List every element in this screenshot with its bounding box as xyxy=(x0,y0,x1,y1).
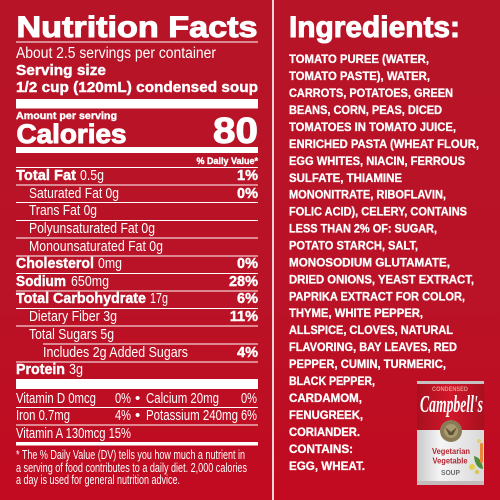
calories block: Amount per serving xyxy=(16,111,117,122)
vitamins and minerals: Potassium 240mg xyxy=(146,407,238,424)
nutrient table: 650mg xyxy=(71,273,109,290)
nutrient table: 6% xyxy=(237,291,258,307)
vitamins and minerals: Vitamin A 130mcg 15% xyxy=(16,425,131,442)
nutrient table: Total Sugars 5g xyxy=(29,326,114,343)
nutrient table: 0% xyxy=(237,256,258,272)
ingredient list: DRIED ONIONS, YEAST EXTRACT, xyxy=(289,272,474,286)
nutrient table: Polyunsaturated Fat 0g xyxy=(29,220,155,237)
nutrient table: Total Carbohydrate xyxy=(16,291,146,307)
icon: Campbell's soup can xyxy=(417,381,484,485)
nutrient table: 17g xyxy=(150,290,168,307)
calories block: 80 xyxy=(213,110,258,151)
nutrient table: 28% xyxy=(229,274,258,290)
nutrient table: Includes 2g Added Sugars xyxy=(43,344,188,361)
vitamins and minerals: 6% xyxy=(241,407,257,424)
ingredient list: TOMATO PASTE), WATER, xyxy=(289,69,430,83)
ingredient list: PAPRIKA EXTRACT FOR COLOR, xyxy=(289,290,465,304)
ingredient list: SULFATE, THIAMINE xyxy=(289,171,402,185)
servings block xyxy=(16,42,258,108)
nutrient table: 11% xyxy=(230,309,258,325)
footnote: a day is used for general nutrition advice. xyxy=(16,473,180,487)
vitamins and minerals: • xyxy=(135,390,140,407)
ingredient list: EGG WHITES, NIACIN, FERROUS xyxy=(289,154,465,168)
servings block: About 2.5 servings per container xyxy=(16,45,216,62)
servings block: 1/2 cup (120mL) condensed soup xyxy=(16,79,258,96)
nutrient table: Trans Fat 0g xyxy=(29,202,97,219)
nutrient table: 4% xyxy=(237,345,258,361)
ingredient list: MONOSODIUM GLUTAMATE, xyxy=(289,256,450,270)
ingredient list xyxy=(289,52,479,473)
vitamins and minerals xyxy=(16,390,258,446)
nutrient table: Dietary Fiber 3g xyxy=(29,308,117,325)
column divider xyxy=(272,0,274,500)
heading: Nutrition Facts: Nutrition Facts xyxy=(16,11,258,44)
panel: nutrition facts xyxy=(16,11,258,487)
panel: ingredients xyxy=(289,11,484,485)
icon: Campbell's soup can: CONDENSED xyxy=(432,387,469,393)
calories block xyxy=(16,110,258,166)
ingredient list: FOLIC ACID), CELERY, CONTAINS xyxy=(289,204,467,218)
nutrient table: 1% xyxy=(237,168,258,184)
icon: Campbell's soup can: Vegetable xyxy=(432,456,468,466)
nutrient table: Saturated Fat 0g xyxy=(29,185,119,202)
vitamins and minerals: 4% xyxy=(115,407,131,424)
ingredient list: TOMATOES IN TOMATO JUICE, xyxy=(289,120,456,134)
vitamins and minerals: Iron 0.7mg xyxy=(16,407,70,424)
ingredient list: LESS THAN 2% OF: SUGAR, xyxy=(289,222,437,236)
ingredient list: POTATO STARCH, SALT, xyxy=(289,238,418,252)
ingredient list: TOMATO PUREE (WATER, xyxy=(289,52,429,66)
footnote: a serving of food contributes to a daily diet. 2,000 calories xyxy=(16,461,247,475)
nutrient table: Total Fat xyxy=(16,168,76,184)
vitamins and minerals: Calcium 20mg xyxy=(146,390,219,407)
heading: Ingredients: Ingredients: xyxy=(289,11,460,44)
nutrient table: 0mg xyxy=(98,255,122,272)
icon: Campbell's soup can: SOUP xyxy=(441,470,460,477)
vitamins and minerals: • xyxy=(135,407,140,424)
vitamins and minerals: Vitamin D 0mcg xyxy=(16,390,96,407)
nutrient table: Protein xyxy=(16,362,65,378)
icon: Campbell's soup can: Vegetarian xyxy=(432,446,470,456)
nutrient table: 3g xyxy=(69,361,83,378)
nutrient table: 0% xyxy=(237,186,258,202)
ingredient list: BLACK PEPPER, xyxy=(289,374,375,388)
ingredient list: MONONITRATE, RIBOFLAVIN, xyxy=(289,188,446,202)
nutrient table: Monounsaturated Fat 0g xyxy=(29,238,163,255)
nutrient table: Cholesterol xyxy=(16,256,94,272)
vitamins and minerals: 0% xyxy=(241,390,257,407)
nutrient table: 0.5g xyxy=(80,167,104,184)
ingredient list: ENRICHED PASTA (WHEAT FLOUR, xyxy=(289,137,479,151)
vitamins and minerals: 0% xyxy=(115,390,131,407)
calories block: % Daily Value* xyxy=(196,156,258,166)
servings block: Serving size xyxy=(16,62,106,79)
ingredient list: EGG, WHEAT. xyxy=(289,459,365,473)
nutrient table xyxy=(16,167,258,389)
ingredient list: CARDAMOM, xyxy=(289,391,362,405)
ingredient list: FENUGREEK, xyxy=(289,408,363,422)
nutrient table: Sodium xyxy=(16,274,66,290)
ingredient list: CARROTS, POTATOES, GREEN xyxy=(289,86,453,100)
footnote xyxy=(16,448,247,487)
ingredient list: FLAVORING, BAY LEAVES, RED xyxy=(289,340,457,354)
ingredient list: THYME, WHITE PEPPER, xyxy=(289,306,423,320)
ingredient list: CORIANDER. xyxy=(289,425,360,439)
ingredient list: CONTAINS: xyxy=(289,442,353,456)
footnote: * The % Daily Value (DV) tells you how much a nutrient in xyxy=(16,448,245,462)
ingredient list: BEANS, CORN, PEAS, DICED xyxy=(289,103,442,117)
ingredient list: ALLSPICE, CLOVES, NATURAL xyxy=(289,323,453,337)
calories block: Calories xyxy=(16,119,126,149)
ingredient list: PEPPER, CUMIN, TURMERIC, xyxy=(289,357,446,371)
